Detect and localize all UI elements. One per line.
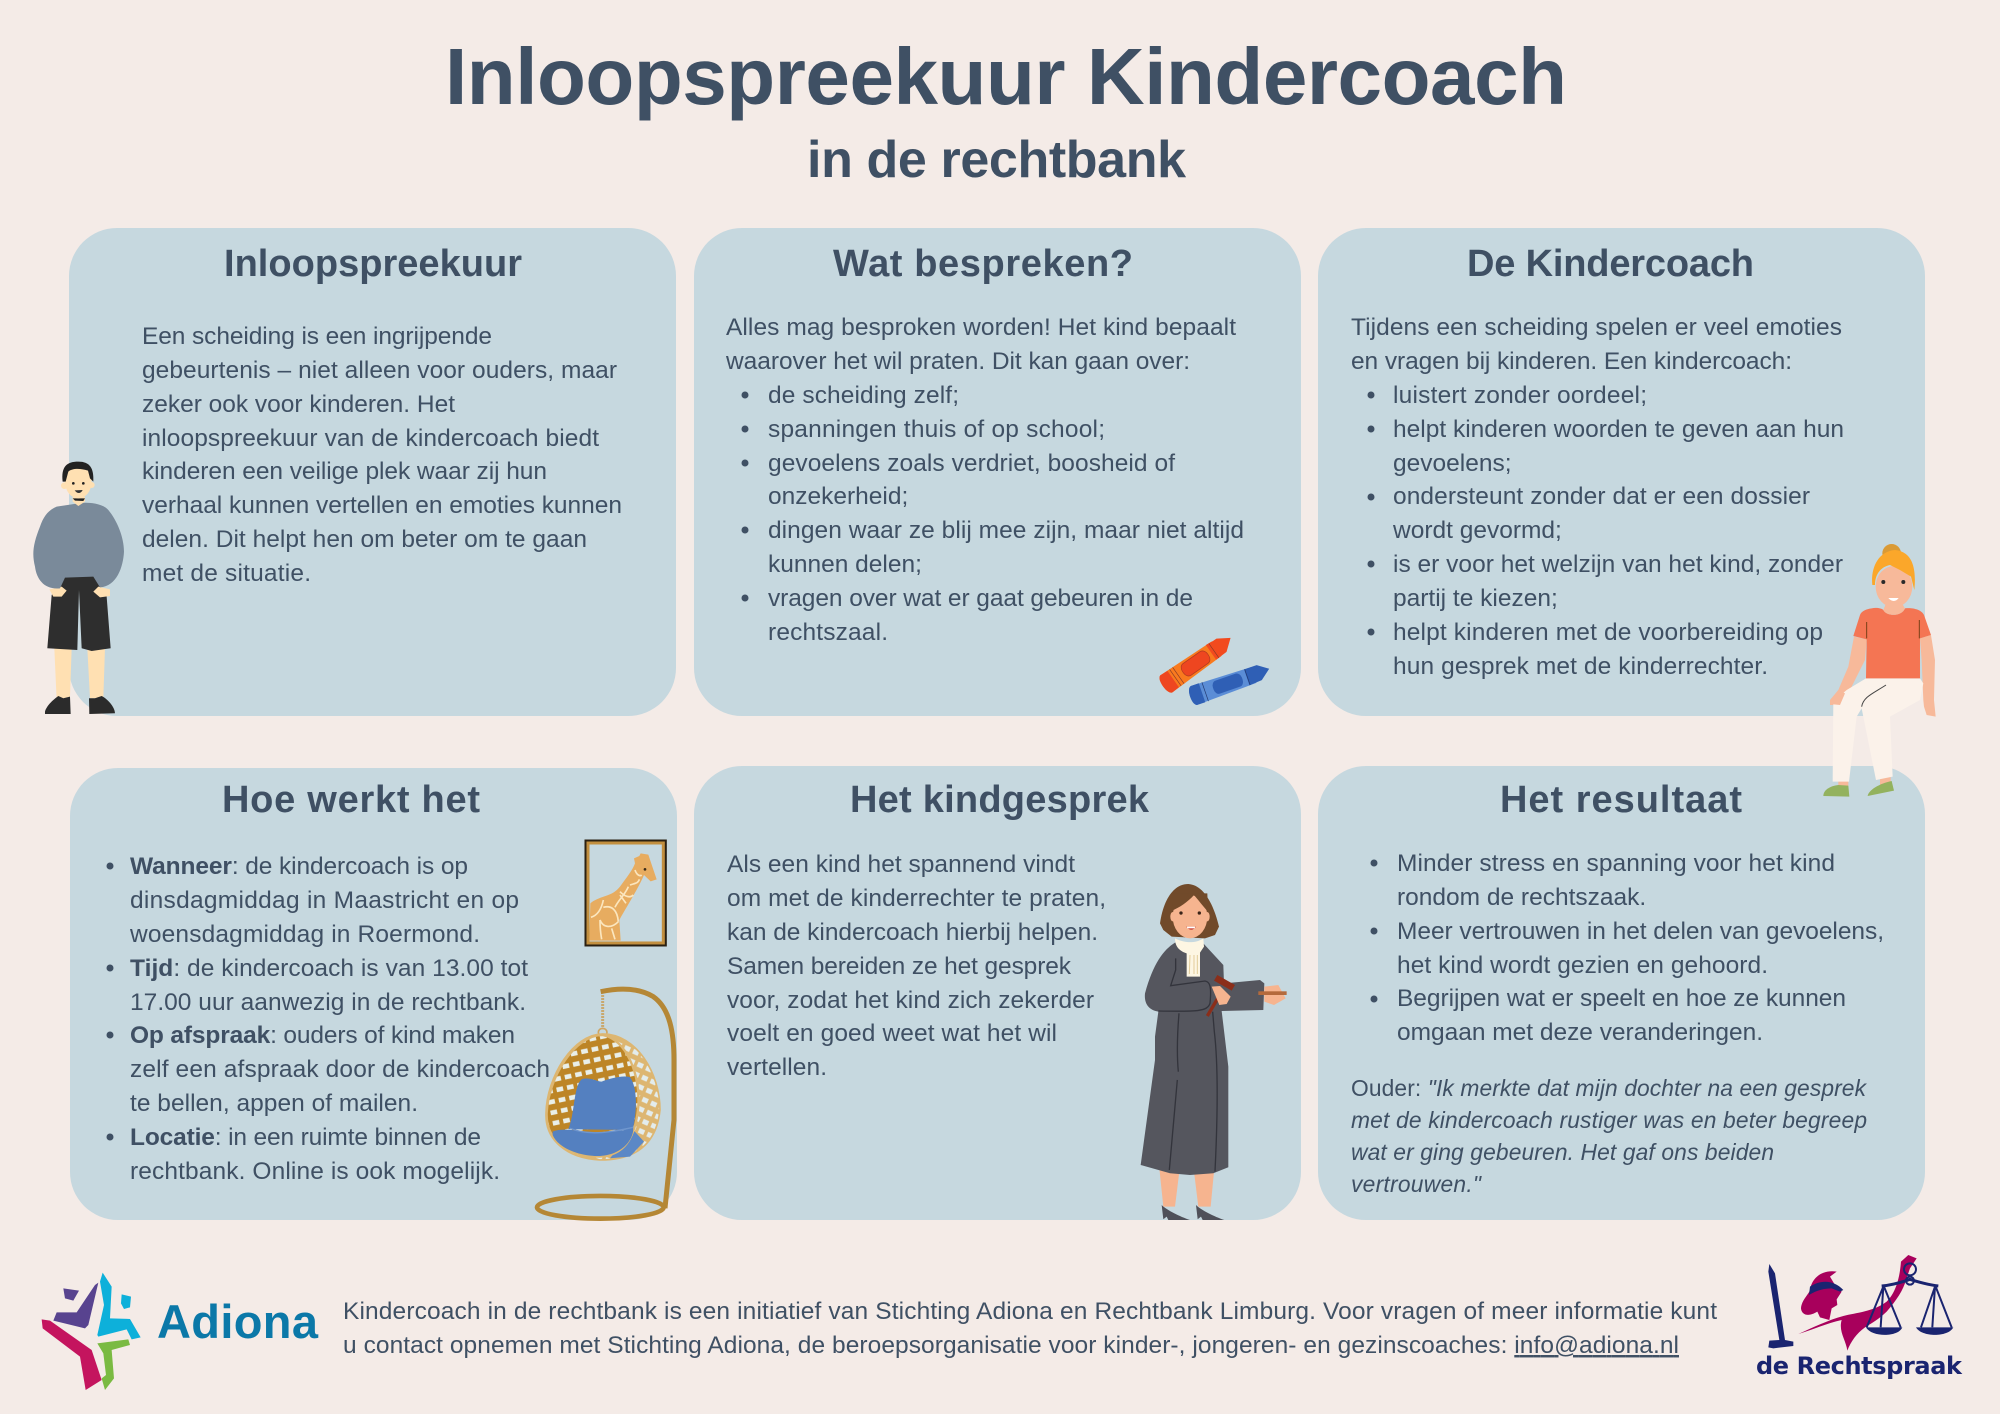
text block: child conversation: kan de kindercoach hierbij helpen. bbox=[727, 919, 1098, 946]
text block: results list: Minder stress en spanning voor het kind bbox=[1397, 850, 1835, 877]
text block: what a kindercoach does: helpt kinderen woorden te geven aan hun bbox=[1393, 416, 1844, 443]
panel: Wat bespreken? bbox=[694, 228, 1301, 716]
text block: practical details: Locatie: in een ruimte binnen de bbox=[130, 1124, 481, 1151]
panel: Het kindgesprek bbox=[694, 766, 1301, 1220]
text block: topics list: gevoelens zoals verdriet, boosheid of bbox=[768, 450, 1175, 477]
text block: practical details: Op afspraak: ouders of kind maken bbox=[130, 1022, 515, 1049]
text block: topics list bbox=[725, 314, 1244, 646]
text block: parent quote bbox=[1351, 1075, 1868, 1197]
text block: child conversation bbox=[727, 851, 1106, 1081]
text block: results list: het kind wordt gezien en gehoord. bbox=[1397, 952, 1768, 979]
heading: Hoe werkt het: Hoe werkt het bbox=[222, 779, 480, 821]
text block: introduction: inloopspreekuur van de kindercoach biedt bbox=[142, 425, 599, 452]
footer text bbox=[343, 1298, 1717, 1359]
text block: results list: rondom de rechtszaak. bbox=[1397, 884, 1646, 911]
icon: crayons bbox=[1157, 630, 1273, 706]
icon: hanging egg chair bbox=[537, 989, 674, 1219]
text block: practical details: rechtbank. Online is ook mogelijk. bbox=[130, 1158, 500, 1185]
heading: Inloopspreekuur: Inloopspreekuur bbox=[224, 243, 522, 285]
text block: parent quote: met de kindercoach rustiger was en beter begreep bbox=[1351, 1107, 1867, 1133]
text block: topics list: vragen over wat er gaat gebeuren in de bbox=[768, 585, 1193, 612]
icon: framed giraffe bbox=[586, 841, 666, 945]
text block: results list: Begrijpen wat er speelt en hoe ze kunnen bbox=[1397, 985, 1846, 1012]
text block: child conversation: voelt en goed weet wat het wil bbox=[727, 1020, 1057, 1047]
logo: Adiona: Adiona bbox=[157, 1295, 319, 1348]
text block: parent quote: wat er ging gebeuren. Het gaf ons beiden bbox=[1351, 1139, 1774, 1165]
text block: what a kindercoach does bbox=[1351, 314, 1844, 680]
text block: practical details bbox=[106, 853, 550, 1185]
text block: results list bbox=[1370, 850, 1884, 1046]
text block: practical details: 17.00 uur aanwezig in de rechtbank. bbox=[130, 989, 526, 1016]
text block: what a kindercoach does: wordt gevormd; bbox=[1392, 517, 1562, 544]
logo: de Rechtspraak bbox=[1756, 1255, 1963, 1380]
text block: what a kindercoach does: Tijdens een scheiding spelen er veel emoties bbox=[1351, 314, 1842, 341]
text block: results list: Meer vertrouwen in het delen van gevoelens, bbox=[1397, 918, 1884, 945]
text block: introduction: kinderen een veilige plek waar zij hun bbox=[142, 458, 547, 485]
text block: parent quote: vertrouwen." bbox=[1351, 1171, 1482, 1197]
text block: introduction: met de situatie. bbox=[142, 560, 311, 587]
text block: child conversation: Samen bereiden ze het gesprek bbox=[727, 953, 1072, 980]
icon: man figure bbox=[33, 462, 124, 714]
text block: practical details: zelf een afspraak door de kindercoach bbox=[130, 1056, 550, 1083]
text block: parent quote: Ouder: "Ik merkte dat mijn dochter na een gesprek bbox=[1351, 1075, 1868, 1101]
text block: child conversation: Als een kind het spannend vindt bbox=[727, 851, 1075, 878]
logo: Adiona bbox=[42, 1273, 319, 1390]
heading: De Kindercoach: De Kindercoach bbox=[1467, 243, 1754, 285]
panel: De Kindercoach bbox=[1318, 228, 1925, 716]
text block: what a kindercoach does: ondersteunt zonder dat er een dossier bbox=[1393, 483, 1810, 510]
text block: what a kindercoach does: hun gesprek met de kinderrechter. bbox=[1393, 653, 1768, 680]
text block: topics list: kunnen delen; bbox=[768, 551, 922, 578]
text block: practical details: te bellen, appen of mailen. bbox=[130, 1090, 418, 1117]
text block: child conversation: vertellen. bbox=[727, 1054, 827, 1081]
text block: what a kindercoach does: gevoelens; bbox=[1393, 450, 1512, 477]
text block: introduction bbox=[142, 323, 622, 587]
text block: practical details: woensdagmiddag in Roermond. bbox=[129, 921, 480, 948]
text block: topics list: onzekerheid; bbox=[768, 483, 908, 510]
text block: what a kindercoach does: luistert zonder oordeel; bbox=[1393, 382, 1647, 409]
text block: child conversation: voor, zodat het kind zich zekerder bbox=[727, 987, 1094, 1014]
panel: Het resultaat bbox=[1318, 766, 1925, 1220]
logo: de Rechtspraak: de Rechtspraak bbox=[1756, 1352, 1963, 1380]
subtitle: in de rechtbank bbox=[807, 131, 1186, 189]
text block: what a kindercoach does: partij te kiezen; bbox=[1393, 585, 1558, 612]
text block: topics list: spanningen thuis of op school; bbox=[768, 416, 1105, 443]
text block: topics list: Alles mag besproken worden! Het kind bepaalt bbox=[726, 314, 1236, 341]
text block: introduction: zeker ook voor kinderen. Het bbox=[142, 391, 455, 418]
text block: what a kindercoach does: helpt kinderen met de voorbereiding op bbox=[1393, 619, 1823, 646]
text block: child conversation: om met de kinderrechter te praten, bbox=[727, 885, 1106, 912]
text block: results list: omgaan met deze veranderingen. bbox=[1397, 1019, 1763, 1046]
text block: topics list: de scheiding zelf; bbox=[768, 382, 959, 409]
text block: practical details: Tijd: de kindercoach is van 13.00 tot bbox=[130, 955, 528, 982]
text block: what a kindercoach does: is er voor het welzijn van het kind, zonder bbox=[1393, 551, 1843, 578]
footer text: Kindercoach in de rechtbank is een initiatief van Stichting Adiona en Rechtbank Limburg. Voor vragen of meer informatie kunt bbox=[343, 1298, 1717, 1325]
icon: judge figure bbox=[1141, 884, 1287, 1220]
text block: introduction: gebeurtenis – niet alleen voor ouders, maar bbox=[142, 357, 617, 384]
panel: Hoe werkt het bbox=[70, 768, 677, 1220]
text block: practical details: dinsdagmiddag in Maastricht en op bbox=[130, 887, 519, 914]
title: Inloopspreekuur Kindercoach bbox=[445, 32, 1567, 121]
text block: topics list: dingen waar ze blij mee zijn, maar niet altijd bbox=[768, 517, 1244, 544]
heading: Het resultaat: Het resultaat bbox=[1500, 779, 1742, 821]
text block: introduction: Een scheiding is een ingrijpende bbox=[142, 323, 492, 350]
text block: introduction: delen. Dit helpt hen om beter om te gaan bbox=[142, 526, 587, 553]
footer text: u contact opnemen met Stichting Adiona, de beroepsorganisatie voor kinder-, jongeren- en gezinscoaches: info@adiona.nl bbox=[343, 1332, 1679, 1359]
icon: girl figure bbox=[1823, 544, 1936, 797]
panel: Inloopspreekuur bbox=[69, 228, 676, 716]
heading: Het kindgesprek: Het kindgesprek bbox=[850, 779, 1150, 821]
heading: Wat bespreken?: Wat bespreken? bbox=[833, 243, 1133, 285]
text block: topics list: waarover het wil praten. Dit kan gaan over: bbox=[725, 348, 1190, 375]
text block: what a kindercoach does: en vragen bij kinderen. Een kindercoach: bbox=[1351, 348, 1792, 375]
text block: topics list: rechtszaal. bbox=[768, 619, 888, 646]
text block: introduction: verhaal kunnen vertellen en emoties kunnen bbox=[142, 492, 622, 519]
text block: practical details: Wanneer: de kindercoach is op bbox=[130, 853, 468, 880]
